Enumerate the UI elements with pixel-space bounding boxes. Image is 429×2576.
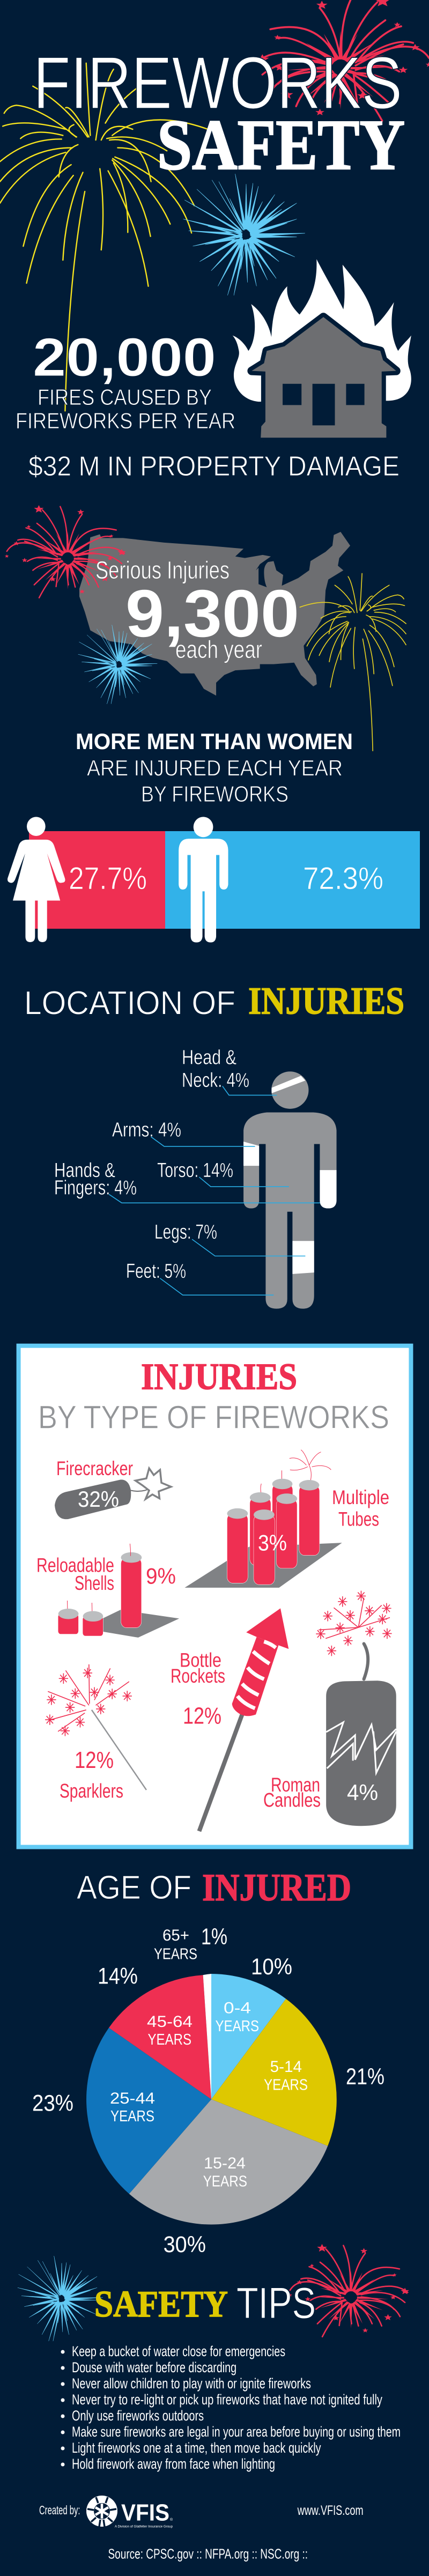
value: 1%: 1% (201, 1924, 227, 1950)
label: reloadable shells (36, 1555, 114, 1594)
value: bottle rockets percent: 12% (183, 1703, 221, 1729)
icon: roman candle (316, 1591, 396, 1826)
label: hands and fingers: Hands & (54, 1159, 115, 1182)
firework: blue burst (18, 2256, 103, 2341)
list: tips: Only use fireworks outdoors (72, 2408, 204, 2424)
list: tips: Light fireworks one at a time, then move back quickly (72, 2440, 321, 2456)
list: tips: Never allow children to play with or ignite fireworks (72, 2375, 311, 2392)
label: 25-44 years: 25-44 (110, 2090, 155, 2107)
text: registered mark: ® (170, 2518, 173, 2522)
value: multiple tubes percent: 3% (258, 1530, 287, 1555)
label: multiple tubes (332, 1486, 389, 1530)
label: feet: Feet: 5% (126, 1260, 186, 1283)
label: multiple tubes: Multiple (332, 1486, 389, 1508)
label: head and neck: Neck: 4% (182, 1069, 249, 1092)
label: bottle rockets (171, 1649, 225, 1687)
icon: reloadable shells (58, 1544, 179, 1638)
value: roman candles percent: 4% (347, 1780, 378, 1805)
heading: tips: TIPS (236, 2279, 316, 2328)
label: 0-4 years: 0-4 (224, 2000, 251, 2017)
location of injuries section (24, 980, 404, 1309)
icon: firecracker (55, 1468, 171, 1519)
label: reloadable shells: Reloadable (36, 1555, 114, 1576)
icon: bottle rocket (199, 1608, 289, 1831)
label: 0-4 years (216, 2000, 259, 2035)
label: hands and fingers (54, 1159, 137, 1200)
footer (39, 2496, 364, 2562)
panel: injuries by type of fireworks (19, 1346, 411, 1847)
label: 65+ years: YEARS (154, 1946, 197, 1963)
map: United States (79, 532, 350, 695)
text: source: Source: CPSC.gov :: NFPA.org :: NSC.org :: (108, 2546, 308, 2562)
heading: location of: LOCATION OF (24, 984, 235, 1022)
heading: age of: AGE OF (77, 1869, 191, 1906)
list: tips: Douse with water before discarding (72, 2359, 236, 2375)
label: 5-14 years (264, 2058, 308, 2093)
label: 15-24 years (203, 2155, 247, 2190)
list: tips: Keep a bucket of water close for emergencies (72, 2343, 285, 2359)
icon: sparkler (45, 1664, 146, 1790)
firework: yellow burst top left (0, 63, 208, 411)
label: 45-64 years: 45-64 (147, 2013, 193, 2031)
label: 25-44 years: YEARS (110, 2108, 154, 2125)
text: created by: Created by: (39, 2503, 80, 2517)
label: 15-24 years: 15-24 (204, 2155, 246, 2172)
label: 5-14 years: YEARS (264, 2076, 308, 2093)
heading: are injured each year: ARE INJURED EACH YEAR (87, 755, 343, 781)
value: 14%: 14% (98, 1964, 138, 1989)
stat: 9,300: 9,300 (125, 576, 299, 651)
value: men percent: 72.3% (303, 861, 383, 896)
label: bottle rockets: Bottle (180, 1649, 221, 1671)
label: 45-64 years: YEARS (148, 2031, 191, 2048)
figure: injured body (243, 1071, 337, 1309)
firework: red burst (289, 2245, 408, 2337)
label: hands and fingers: Fingers: 4% (54, 1177, 137, 1200)
value: 30%: 30% (164, 2232, 206, 2257)
panel background (19, 1346, 411, 1847)
heading: by type of fireworks: BY TYPE OF FIREWORKS (38, 1400, 389, 1435)
label: 5-14 years: 5-14 (270, 2058, 302, 2076)
value: sparklers percent: 12% (75, 1747, 114, 1773)
icon: VFIS emblem (86, 2496, 117, 2527)
label: 0-4 years: YEARS (216, 2018, 259, 2035)
list: tips (61, 2343, 401, 2472)
label: torso: Torso: 14% (157, 1159, 233, 1182)
icon: multiple tubes (184, 1450, 342, 1588)
serious injuries section (5, 506, 406, 751)
label: roman candles: Roman (271, 1774, 320, 1796)
gender section (8, 729, 420, 943)
firework: red burst top right (258, 0, 429, 121)
label: legs: Legs: 7% (154, 1221, 217, 1243)
list: tips: Hold firework away from face when lighting (72, 2456, 275, 2472)
label: reloadable shells: Shells (75, 1572, 114, 1594)
bar: men (165, 831, 420, 929)
text: fires caused by: FIRES CAUSED BY (38, 384, 212, 410)
label: arms: Arms: 4% (112, 1119, 181, 1142)
text: serious injuries: Serious Injuries (95, 556, 230, 584)
label: 65+ years: 65+ (162, 1927, 189, 1944)
label: 45-64 years (147, 2013, 193, 2048)
heading: safety: SAFETY (94, 2284, 228, 2325)
label: 15-24 years: YEARS (203, 2173, 247, 2190)
icon: man (179, 817, 228, 943)
value: 21%: 21% (346, 2064, 384, 2090)
firework: blue burst (183, 174, 305, 295)
firework: blue burst on map (78, 625, 157, 704)
label: roman candles (263, 1774, 321, 1811)
text: logo tagline: A Division of Glatfelter Insurance Group (115, 2525, 173, 2529)
label: sparklers: Sparklers (60, 1780, 123, 1802)
value: 23%: 23% (32, 2091, 73, 2116)
icon: burning house (233, 259, 411, 438)
label: multiple tubes: Tubes (338, 1508, 379, 1530)
text: each year: each year (175, 635, 262, 663)
value: reloadable shells percent: 9% (146, 1564, 176, 1588)
heading: by fireworks: BY FIREWORKS (141, 781, 289, 806)
text: website: www.VFIS.com (297, 2503, 364, 2518)
label: firecracker: Firecracker (56, 1457, 133, 1479)
heading: injured: INJURED (202, 1866, 351, 1909)
label: bottle rockets: Rockets (171, 1665, 225, 1687)
bar: women (29, 831, 165, 929)
stat: 20,000: 20,000 (33, 328, 216, 388)
label: head and neck: Head & (182, 1046, 236, 1069)
leader lines (109, 1086, 320, 1295)
label: head and neck (182, 1046, 249, 1092)
heading: injuries: INJURIES (248, 980, 404, 1023)
pie chart (86, 1974, 337, 2225)
label: roman candles: Candles (263, 1789, 321, 1811)
text: fireworks per year: FIREWORKS PER YEAR (16, 408, 235, 433)
value: firecracker percent: 32% (78, 1486, 119, 1512)
fires section (16, 259, 411, 482)
safety tips section (18, 2245, 408, 2472)
age of injured section (32, 1866, 384, 2257)
heading: injuries: INJURIES (141, 1357, 297, 1398)
value: women percent: 27.7% (69, 861, 147, 896)
heading: more men than women: MORE MEN THAN WOMEN (76, 729, 353, 754)
firework: red burst on map (5, 506, 125, 598)
firework: yellow burst on map (300, 573, 406, 751)
label: 25-44 years (110, 2090, 155, 2125)
stat: property damage: $32 M IN PROPERTY DAMAGE (28, 451, 400, 482)
logo: VFIS wordmark: VFIS (121, 2500, 169, 2526)
value: 10%: 10% (251, 1954, 292, 1980)
header section (0, 0, 429, 411)
icon: woman (8, 817, 65, 942)
label: 65+ years (154, 1927, 197, 1963)
